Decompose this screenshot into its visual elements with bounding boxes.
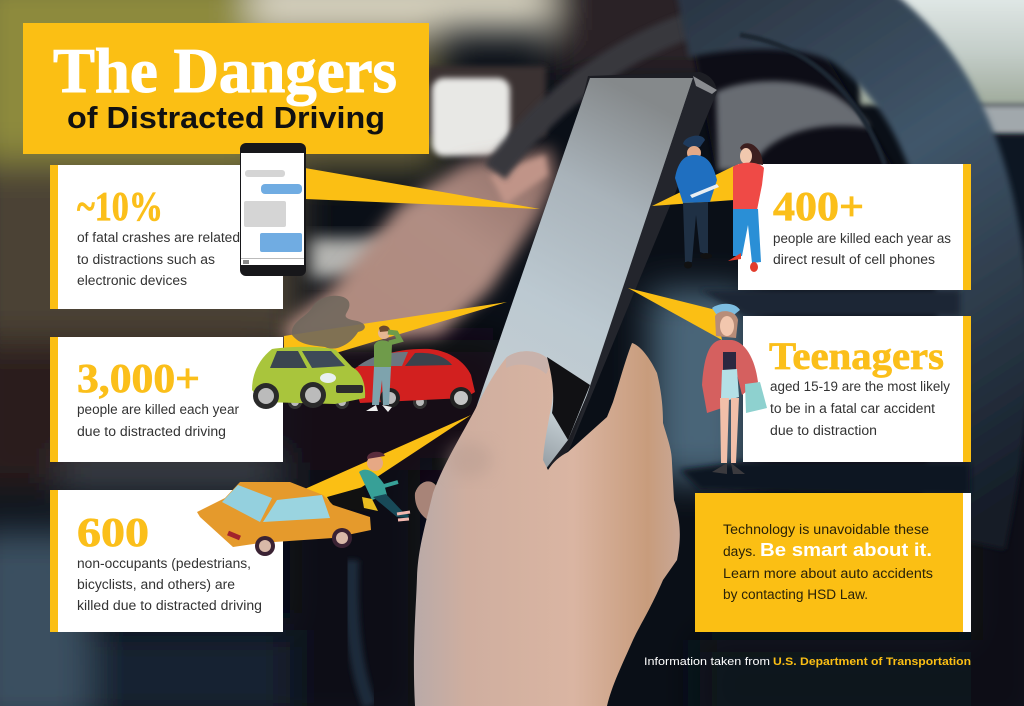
panel: 600: killed due to distracted driving [77, 598, 262, 613]
sky and dash, upper right [860, 0, 1024, 105]
panel: call to action: Learn more about auto accidents [723, 566, 933, 581]
callout wedge: officer [652, 166, 734, 206]
panel: 10 percent: ~10% [77, 183, 163, 229]
callout wedge: pedestrian [298, 415, 471, 510]
callout wedge: teenager [628, 288, 722, 340]
steering wheel rim [495, 22, 700, 172]
panel: 10 percent: electronic devices [77, 273, 187, 288]
title banner: of Distracted Driving [67, 100, 385, 135]
panel: 10 percent: of fatal crashes are related [77, 230, 240, 245]
icon: teenage girl [702, 304, 767, 474]
side mirror [428, 66, 546, 136]
panel: 10 percent [50, 165, 283, 309]
panel: call to action [695, 493, 971, 632]
icon: smartphone with chat [240, 143, 306, 276]
panel: 600: 600 [77, 509, 149, 555]
panel: 3000: due to distracted driving [77, 424, 226, 439]
dark shapes behind lower right [680, 462, 970, 495]
icon: police officer and woman [675, 136, 764, 272]
icon: car crash with smoke and man [252, 296, 475, 412]
panel: teenagers: due to distraction [770, 423, 877, 438]
panel: teenagers: to be in a fatal car accident [770, 401, 935, 416]
phone held in hand [470, 72, 717, 470]
red car [413, 395, 427, 409]
arm and hand behind phone [285, 148, 556, 342]
panel: 3000: people are killed each year [77, 402, 240, 417]
panel: 400: direct result of cell phones [773, 252, 935, 267]
panel: teenagers [743, 316, 971, 462]
panel: call to action: days. [723, 544, 756, 559]
man [378, 327, 390, 339]
woman [740, 143, 763, 165]
panel: 3000 [50, 337, 283, 462]
thumb nail [506, 351, 549, 374]
dark grip tab [547, 357, 590, 440]
panel: teenagers: aged 15-19 are the most likely [770, 379, 950, 394]
panel: 10 percent: to distractions such as [77, 252, 215, 267]
panel: teenagers: Teenagers [769, 335, 944, 378]
title banner [23, 23, 429, 154]
panel: 400: 400+ [773, 183, 864, 229]
officer [683, 136, 705, 147]
source note: U.S. Department of Transportation [773, 656, 971, 668]
panel: call to action: Be smart about it. [760, 539, 932, 560]
source note: Information taken from [644, 656, 770, 668]
panel: call to action: Technology is unavoidable these [723, 522, 929, 537]
smoke [292, 296, 365, 349]
hollow of wheel [690, 30, 895, 170]
panel: 600: non-occupants (pedestrians, [77, 556, 251, 571]
panel: 3000: 3,000+ [77, 355, 200, 401]
panel: 600 [50, 490, 283, 632]
panel: call to action: by contacting HSD Law. [723, 587, 868, 602]
source note [644, 656, 971, 668]
panel: 400: people are killed each year as [773, 231, 951, 246]
back finger [415, 481, 438, 520]
title banner: The Dangers [53, 35, 397, 106]
icon: orange car and pedestrian [197, 452, 410, 556]
hand holding phone [414, 343, 680, 706]
pedestrian [367, 455, 383, 471]
callout wedge: phone [305, 168, 540, 209]
green car [288, 395, 302, 409]
panel: 400 [738, 164, 971, 290]
panel: 600: bicyclists, and others) are [77, 577, 235, 592]
callout wedge: cars [284, 302, 507, 353]
